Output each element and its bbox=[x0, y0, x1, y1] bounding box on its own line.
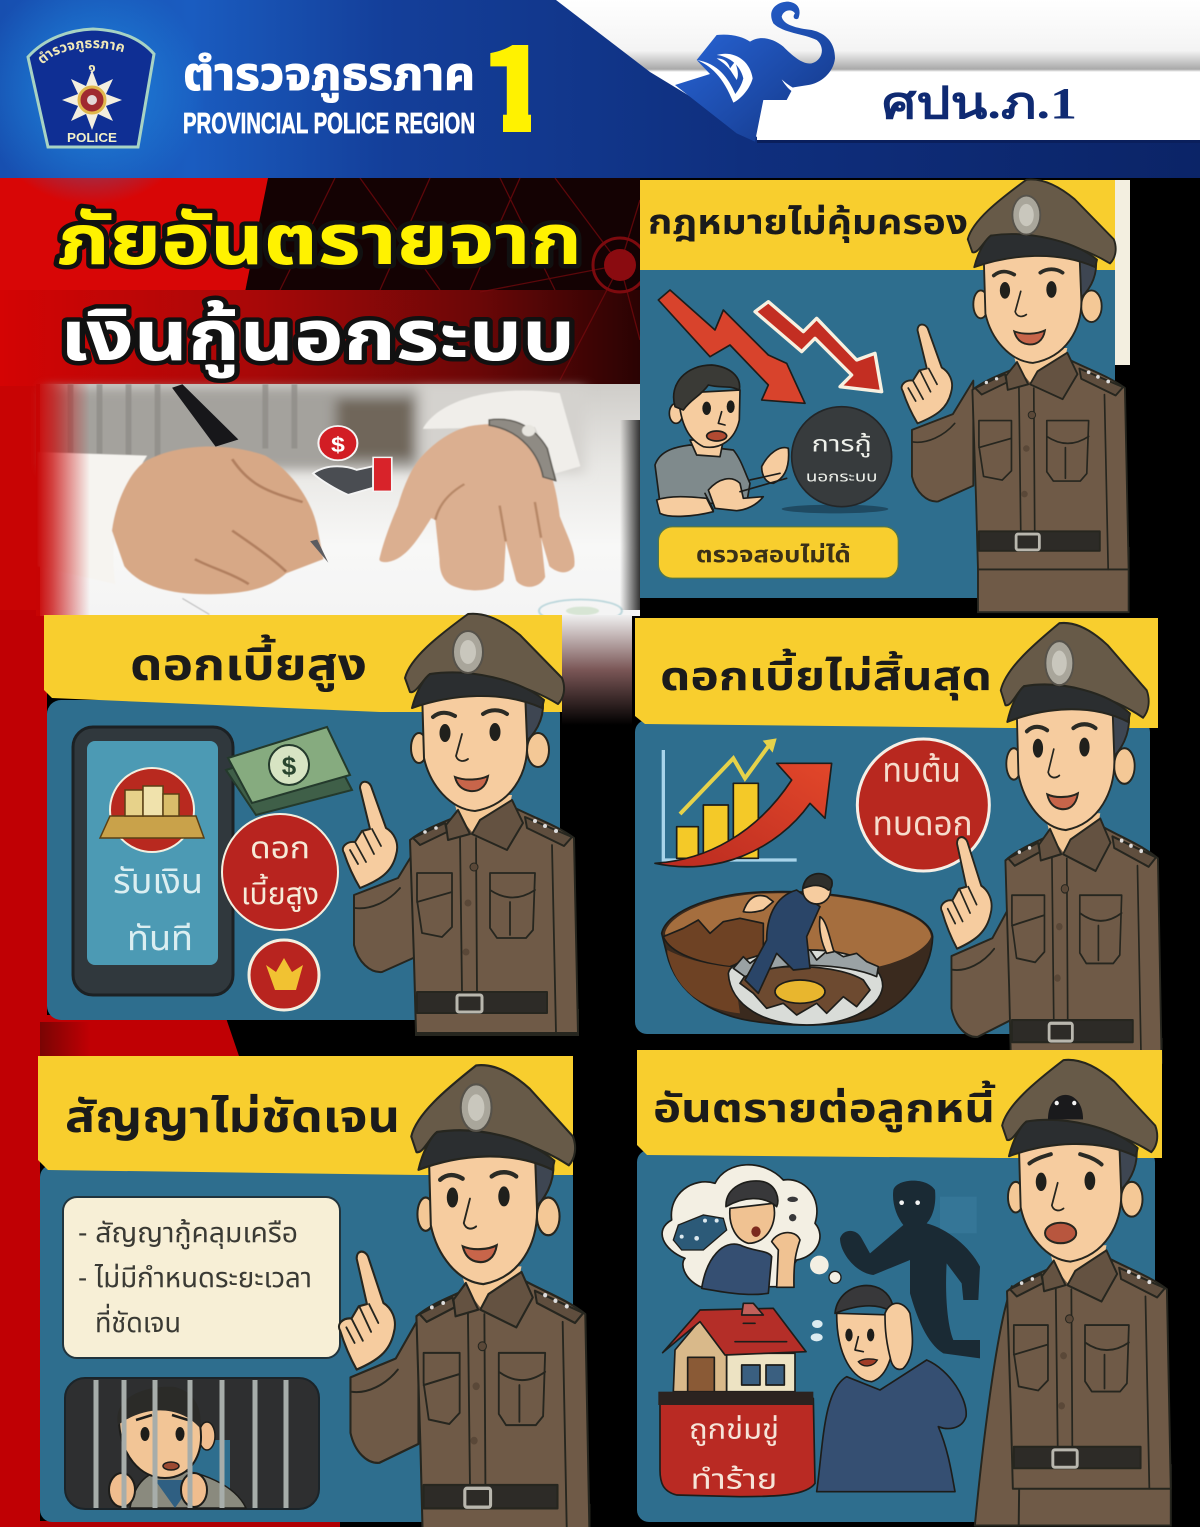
title line 1: ภัยอันตรายจาก bbox=[57, 201, 582, 279]
lowered arm bbox=[975, 1286, 1021, 1526]
photo: hands signing a contract bbox=[36, 384, 640, 725]
note line 2: - ไม่มีกำหนดระยะเวลา bbox=[78, 1262, 312, 1293]
icon: police shield logo: POLICE bbox=[67, 130, 117, 145]
white right panel bbox=[556, 0, 1200, 72]
rising debt chart bbox=[655, 738, 832, 867]
house bbox=[663, 1303, 806, 1392]
note line 3: ที่ชัดเจน bbox=[95, 1303, 181, 1338]
officer bbox=[975, 1060, 1171, 1526]
scene: threats bbox=[658, 1165, 980, 1497]
badge: compounding bbox=[857, 739, 989, 871]
panel: danger to debtors bbox=[637, 1050, 1171, 1526]
right sleeve bbox=[423, 390, 580, 473]
heading: ดอกเบี้ยไม่สิ้นสุด bbox=[660, 648, 992, 701]
icon: police shield logo: ตำรวจภูธรภาค bbox=[38, 40, 124, 64]
other hand bbox=[379, 424, 575, 590]
phone bbox=[73, 727, 233, 995]
badge: high interest: เบี้ยสูง bbox=[241, 873, 319, 912]
header band bbox=[640, 180, 1115, 270]
scene: debtor chained to ball bbox=[655, 290, 898, 578]
ball label line 1: การกู้ bbox=[812, 432, 872, 458]
sign text line 1: ถูกข่มขู่ bbox=[689, 1413, 779, 1445]
pen bbox=[172, 384, 238, 447]
officer bbox=[339, 1065, 589, 1527]
note line 1: - สัญญากู้คลุมเครือ bbox=[78, 1217, 298, 1250]
shadow figure on cap bbox=[1048, 1095, 1083, 1119]
badge: high interest: ดอก bbox=[250, 832, 310, 865]
blurred shirt and background bbox=[46, 388, 585, 473]
header band bbox=[635, 618, 1158, 728]
debtor figure bbox=[655, 365, 789, 516]
worried debtor bbox=[811, 1286, 966, 1492]
trapped man bbox=[745, 890, 820, 993]
header banner bbox=[0, 0, 1200, 200]
shadow figure bbox=[840, 1181, 980, 1358]
heading: ดอกเบี้ยสูง bbox=[130, 634, 367, 692]
paper lines and stamp bbox=[182, 598, 209, 614]
heading: English organisation name: PROVINCIAL POLICE REGION bbox=[183, 108, 475, 140]
panel: high interest bbox=[44, 614, 578, 1035]
icon: banknotes: $ bbox=[282, 751, 297, 781]
callout text: ตรวจสอบไม่ได้ bbox=[696, 542, 851, 567]
heading: อันตรายต่อลูกหนี้ bbox=[653, 1080, 996, 1133]
icon: money in hand: $ bbox=[331, 433, 345, 457]
panel: unclear contract bbox=[38, 1056, 589, 1527]
car crash in thought bbox=[673, 1215, 727, 1250]
writing hand bbox=[112, 447, 323, 594]
officer bbox=[343, 614, 578, 1035]
faint background building bbox=[940, 1197, 977, 1233]
bear trap bbox=[728, 950, 883, 1025]
heading: กฎหมายไม่คุ้มครอง bbox=[648, 203, 968, 243]
heading: Thai organisation name: ตำรวจภูธรภาค bbox=[183, 48, 475, 102]
arrow: red falling outlined bbox=[755, 302, 882, 392]
header band bbox=[637, 1050, 1162, 1158]
callout pill bbox=[658, 527, 898, 578]
arrow: red rising bbox=[655, 763, 832, 867]
watch bbox=[489, 419, 556, 481]
red background with network lines bbox=[0, 178, 647, 1527]
icon: police shield logo: ๑ bbox=[88, 59, 96, 75]
remembered debtor bbox=[702, 1244, 772, 1294]
icon: banknotes bbox=[226, 727, 352, 815]
gold bars bbox=[100, 786, 204, 838]
header band bbox=[44, 615, 562, 712]
badge: high interest bbox=[222, 814, 338, 930]
unit name: ศปน.ภ.1 bbox=[882, 79, 1077, 128]
heading: สัญญาไม่ชัดเจน bbox=[65, 1093, 400, 1142]
sign text line 2: ทำร้าย bbox=[691, 1463, 777, 1494]
thought cloud bbox=[662, 1165, 820, 1287]
title line 2: เงินกู้นอกระบบ bbox=[60, 297, 575, 378]
ball shadow bbox=[782, 505, 888, 513]
threat sign bbox=[658, 1392, 815, 1497]
ball bbox=[792, 407, 892, 507]
icon: warning badge bbox=[249, 940, 319, 1010]
ball label line 2: นอกระบบ bbox=[806, 469, 877, 485]
officer bbox=[902, 179, 1129, 612]
officer bbox=[941, 623, 1162, 1063]
icon: police shield logo bbox=[26, 28, 156, 148]
badge: compounding: ทบต้น bbox=[882, 752, 961, 790]
title bbox=[57, 201, 582, 378]
icon: elephant logo bbox=[675, 2, 835, 142]
arrow: red falling bbox=[658, 290, 805, 403]
phone text line 2: ทันที bbox=[127, 919, 193, 958]
panel: law does not protect bbox=[640, 179, 1130, 612]
panel: endless interest bbox=[635, 618, 1162, 1063]
jail scene bbox=[65, 1378, 319, 1509]
icon: money in hand bbox=[313, 426, 392, 495]
phone text line 1: รับเงิน bbox=[113, 862, 203, 901]
note card bbox=[63, 1197, 340, 1358]
pit with trap bbox=[662, 874, 933, 1025]
badge: compounding: ทบดอก bbox=[873, 805, 973, 843]
header band bbox=[38, 1056, 573, 1175]
left cuff bbox=[37, 452, 147, 584]
